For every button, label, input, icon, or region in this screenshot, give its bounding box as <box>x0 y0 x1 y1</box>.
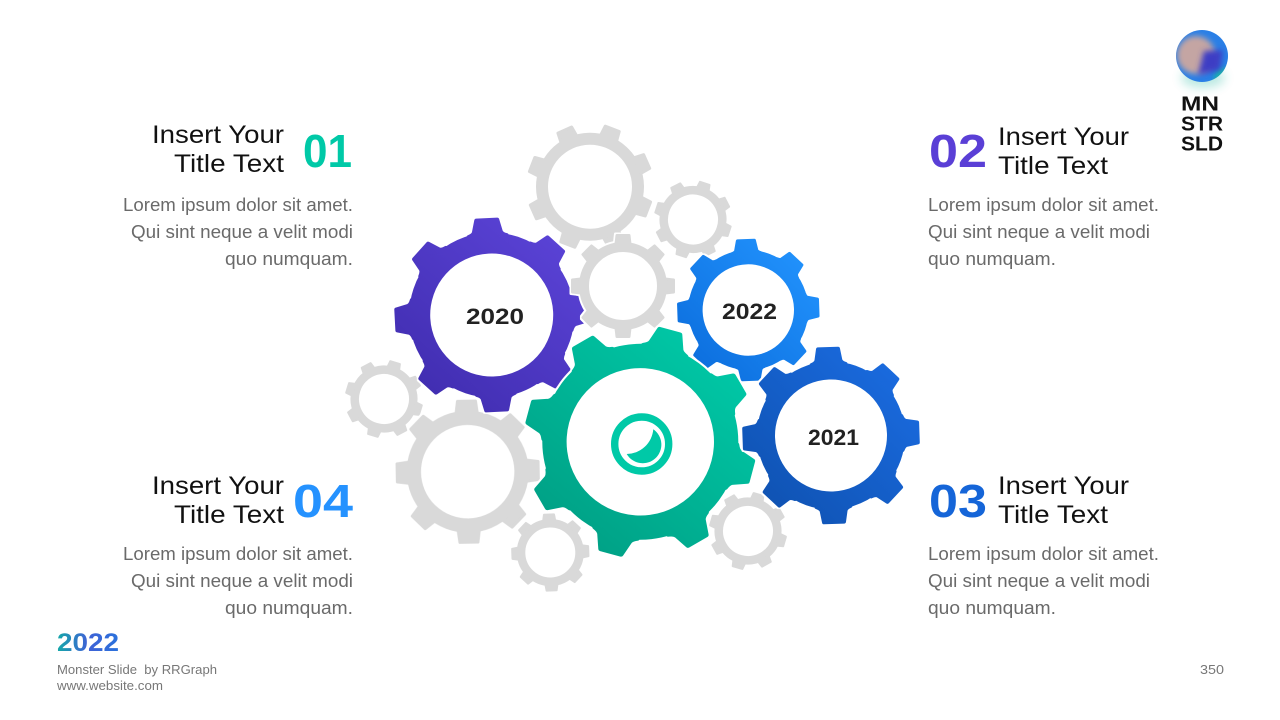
text block 02: Qui sint neque a velit modi <box>928 222 1150 242</box>
year label 2022: 2022 <box>722 299 777 324</box>
text block 03: Title Text <box>998 501 1108 529</box>
logo wordmark: MN <box>1181 94 1219 116</box>
logo: gradient sphere <box>1176 30 1234 88</box>
text block 04: Lorem ipsum dolor sit amet. <box>123 544 353 564</box>
text block 01: Insert Your <box>152 121 284 149</box>
text block 04: 04 <box>293 475 353 527</box>
text block 03 <box>928 472 1159 618</box>
gear: teal center <box>525 326 756 557</box>
text block 03: Insert Your <box>998 472 1129 500</box>
gear: gray small lower right <box>701 484 795 578</box>
gear: gray small left <box>337 352 431 446</box>
gear: blue 2022 <box>677 238 820 382</box>
text block 04 <box>123 472 353 618</box>
gear: gray middle <box>572 235 674 337</box>
text block 02: Lorem ipsum dolor sit amet. <box>928 195 1159 215</box>
text block 01: Title Text <box>174 150 284 178</box>
text block 01: Qui sint neque a velit modi <box>131 222 353 242</box>
text block 01: 01 <box>303 125 352 177</box>
text block 03: Lorem ipsum dolor sit amet. <box>928 544 1159 564</box>
footer year: 2022 <box>57 629 119 657</box>
year label 2020: 2020 <box>466 304 524 329</box>
text block 04: quo numquam. <box>225 598 353 618</box>
footer credits <box>56 662 217 693</box>
page number: 350 <box>1200 662 1224 677</box>
text block 03: quo numquam. <box>928 598 1056 618</box>
gear: gray large top <box>510 107 670 267</box>
gear: purple 2020 <box>394 218 584 414</box>
gear: gray small top right <box>645 172 741 267</box>
footer credits: Monster Slide by RRGraph <box>57 662 217 677</box>
text block 04: Qui sint neque a velit modi <box>131 571 353 591</box>
text block 02 <box>928 123 1159 269</box>
logo wordmark: STR <box>1181 114 1224 136</box>
logo wordmark <box>1181 94 1224 156</box>
text block 01: Lorem ipsum dolor sit amet. <box>123 195 353 215</box>
text block 02: quo numquam. <box>928 249 1056 269</box>
gear: gray large lower left <box>396 400 539 543</box>
gear: gray small bottom <box>511 513 590 592</box>
text block 01 <box>123 121 353 269</box>
year label 2021: 2021 <box>808 425 859 450</box>
text block 02: Insert Your <box>998 123 1129 151</box>
text block 04: Title Text <box>174 501 284 529</box>
text block 03: 03 <box>929 475 987 527</box>
text block 02: Title Text <box>998 152 1108 180</box>
footer credits: www.website.com <box>56 678 163 693</box>
gear: dark blue 2021 <box>741 346 920 524</box>
icon: center crescent logo <box>615 417 669 471</box>
text block 01: quo numquam. <box>225 249 353 269</box>
logo wordmark: SLD <box>1181 134 1223 156</box>
text block 02: 02 <box>929 125 987 177</box>
text block 04: Insert Your <box>152 472 284 500</box>
text block 03: Qui sint neque a velit modi <box>928 571 1150 591</box>
